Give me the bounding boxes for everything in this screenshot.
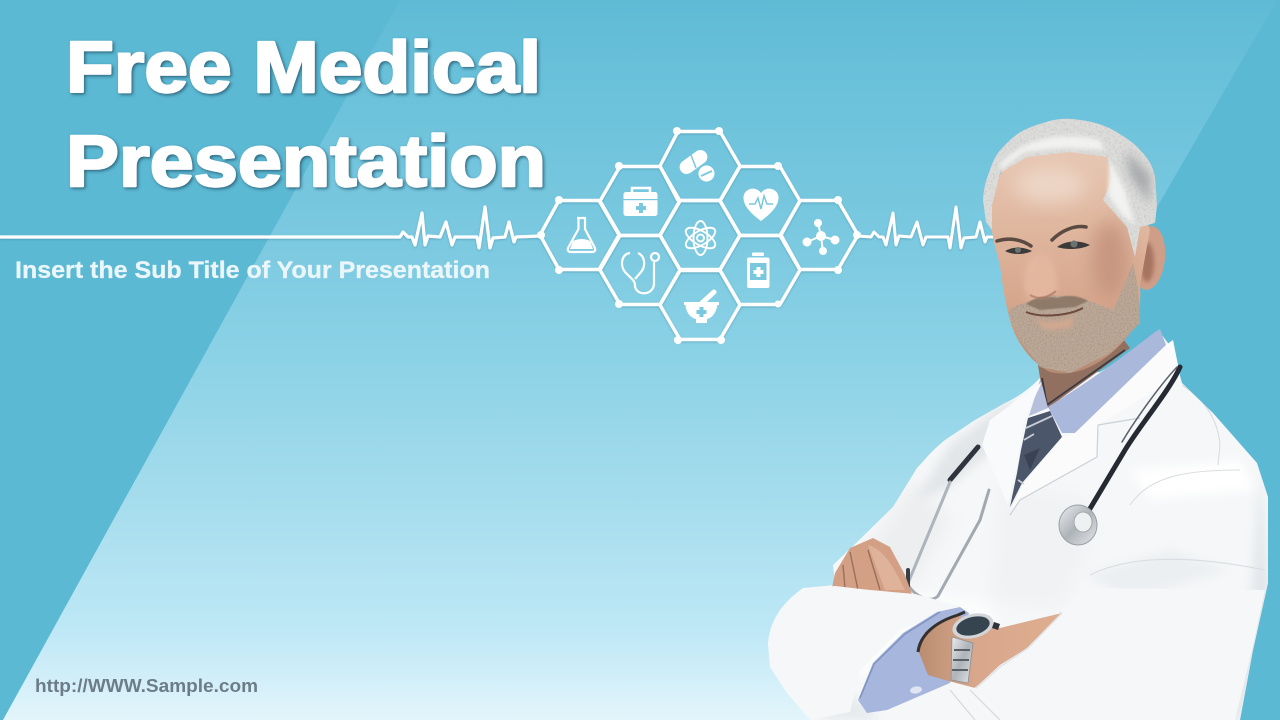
ear — [1130, 225, 1168, 291]
hair highlight — [1000, 136, 1150, 225]
icon: medicine bottle — [747, 252, 770, 288]
face — [990, 140, 1150, 373]
necktie — [1010, 411, 1062, 507]
shirt collar — [1029, 329, 1166, 433]
icon: heart with pulse — [743, 189, 779, 221]
title: Presentation — [66, 122, 546, 202]
mustache and mouth — [1026, 296, 1088, 330]
icon: stethoscope — [622, 253, 659, 293]
beard — [1008, 263, 1140, 373]
white lab coat — [768, 335, 1270, 720]
crossed hand — [832, 538, 912, 594]
stethoscope chest piece — [1059, 505, 1097, 545]
nose — [1027, 255, 1056, 298]
icon: pills — [677, 147, 714, 182]
icon: atom — [683, 221, 718, 255]
icon: first aid kit — [624, 188, 658, 216]
coat lapels — [982, 340, 1180, 515]
heartbeat line — [0, 207, 996, 248]
right sleeve overlay — [950, 588, 1265, 720]
title: Free Medical — [66, 28, 541, 108]
neck — [1038, 335, 1130, 408]
icon: molecule — [803, 220, 839, 254]
eyes and eyebrows — [997, 227, 1090, 254]
stethoscope — [908, 367, 1180, 599]
wristwatch — [950, 609, 1000, 683]
doctor illustration — [768, 119, 1270, 720]
silver hair — [983, 119, 1157, 257]
subtitle: Insert the Sub Title of Your Presentation — [15, 257, 490, 284]
hexagon icon cluster — [537, 127, 861, 344]
website url: http://WWW.Sample.com — [35, 675, 258, 696]
icon: mortar and pestle — [684, 292, 719, 323]
forearm — [918, 612, 1062, 688]
hexagon nodes — [537, 127, 861, 344]
icon: flask — [568, 218, 595, 252]
coat fold lines — [1060, 384, 1265, 613]
hexagon grid — [540, 132, 858, 340]
sleeve over hand — [768, 586, 960, 720]
head — [983, 119, 1168, 373]
shirt cuff — [858, 607, 969, 713]
title — [66, 28, 546, 202]
